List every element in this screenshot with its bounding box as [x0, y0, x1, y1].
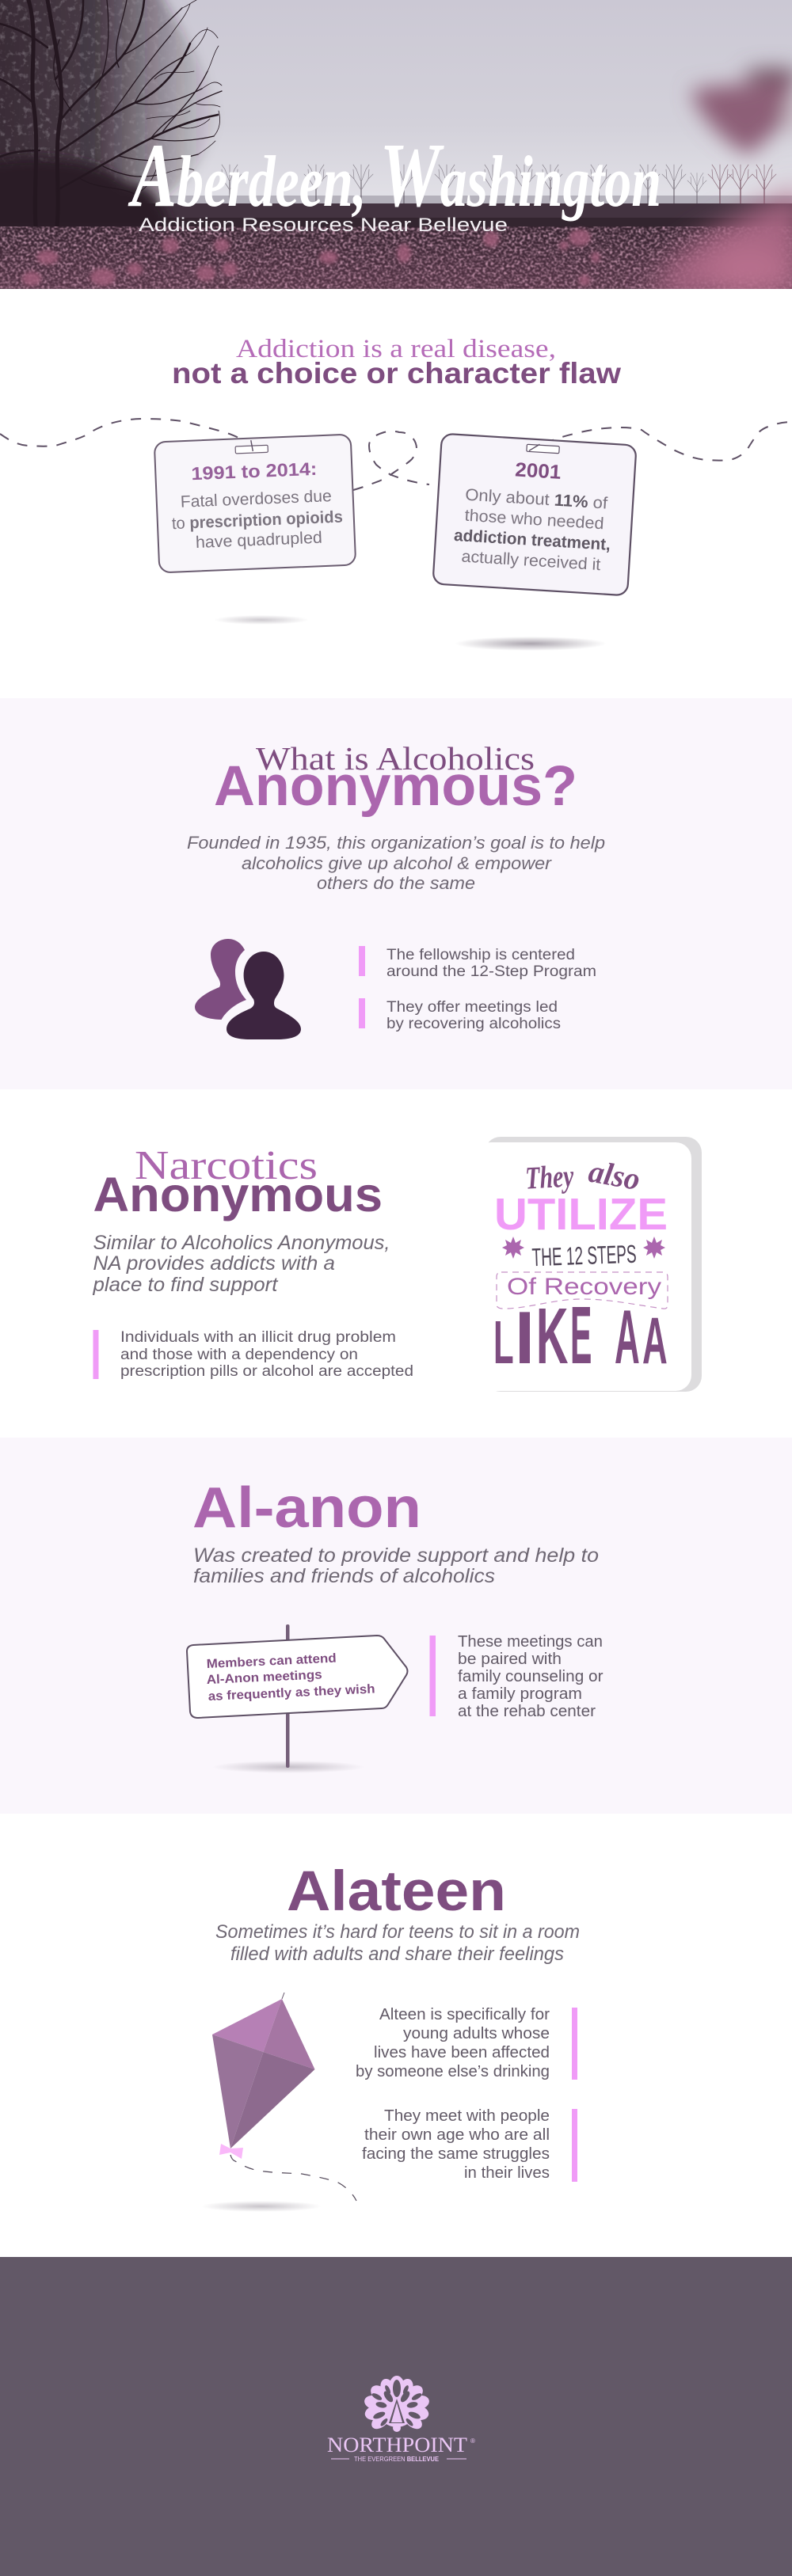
poster: they also utilize the 12 steps: L — [493, 1309, 514, 1377]
card shadow left — [214, 615, 309, 625]
heading: Anonymous? — [214, 755, 577, 818]
title: Aberdeen, Washington — [128, 125, 661, 226]
tree branches — [0, 0, 222, 226]
fact: meetings: They offer meetings led — [386, 999, 558, 1016]
fact: family program: at the rehab center — [458, 1703, 596, 1720]
reddish trees at right of horizon — [708, 165, 776, 204]
heading: Anonymous — [93, 1168, 383, 1222]
section: al-anon — [0, 1438, 792, 1814]
description: NA provides addicts with a — [93, 1252, 335, 1275]
fact: family program: family counseling or — [458, 1668, 604, 1685]
fact: own age: facing the same struggles — [362, 2145, 550, 2163]
fact: own age — [362, 2107, 577, 2182]
fact: meetings: by recovering alcoholics — [386, 1016, 561, 1032]
fact: young adults: young adults whose — [403, 2025, 550, 2042]
dark bushes below the tree — [0, 158, 171, 234]
card: 2001: actually received it — [461, 547, 601, 574]
dark ploughed field — [150, 203, 792, 218]
description — [215, 1921, 580, 1965]
poster: they also utilize the 12 steps: A — [642, 1304, 668, 1378]
card: 2001: addiction treatment, — [454, 526, 611, 554]
blurred flower clusters — [22, 229, 600, 286]
description: filled with adults and share their feelings — [230, 1943, 564, 1965]
fact: young adults — [356, 2006, 577, 2080]
logo wordmark: ® — [470, 2437, 475, 2445]
poster: they also utilize the 12 steps: UTILIZE — [494, 1189, 668, 1240]
section: addiction is a real disease — [0, 289, 792, 698]
poster: they also utilize the 12 steps: also — [586, 1153, 643, 1197]
heading: Al-anon — [192, 1476, 421, 1540]
poster: they also utilize the 12 steps: Of Recovery — [507, 1274, 661, 1300]
section: alcoholics anonymous — [0, 698, 792, 1089]
card: 1991 to 2014: 1991 to 2014: — [191, 458, 318, 484]
heading — [93, 1143, 383, 1222]
fact: young adults: by someone else’s drinking — [356, 2063, 550, 2080]
heading: What is Alcoholics — [256, 740, 535, 777]
signpost — [187, 1624, 407, 1768]
description: others do the same — [317, 873, 475, 893]
description: families and friends of alcoholics — [193, 1565, 495, 1587]
poster: they also utilize the 12 steps: A — [615, 1294, 640, 1380]
card: 2001: Only about 11% of — [465, 486, 608, 513]
fact: young adults: lives have been affected — [374, 2044, 550, 2061]
fact: own age: in their lives — [464, 2164, 550, 2182]
dashed string left — [0, 419, 245, 446]
section: narcotics anonymous — [0, 1089, 792, 1438]
fact: family program: These meetings can — [458, 1633, 603, 1651]
fact: twelve step program: around the 12-Step Program — [386, 963, 596, 980]
card shadow right — [455, 636, 607, 651]
poster: they also utilize the 12 steps: E — [570, 1290, 592, 1381]
card: 1991 to 2014 — [154, 435, 356, 572]
blurred foreground blossom bottom right — [649, 190, 792, 301]
blurred foreground blossom top right — [691, 68, 792, 154]
description: alcoholics give up alcohol & empower — [242, 853, 553, 873]
fact: own age: their own age who are all — [364, 2126, 550, 2144]
fact: twelve step program: The fellowship is centered — [386, 947, 575, 963]
heading — [172, 335, 621, 389]
description — [92, 1232, 390, 1296]
fact: family program — [429, 1633, 604, 1720]
logo: northpoint lotus — [363, 2376, 431, 2432]
dashed string loop — [353, 431, 429, 490]
signpost: as frequently as they wish — [208, 1682, 375, 1704]
fact: who is accepted: and those with a dependency on — [120, 1347, 358, 1363]
poster: they also utilize the 12 steps: They — [524, 1157, 575, 1196]
dashed string right — [525, 422, 792, 461]
description — [193, 1544, 599, 1587]
distant horizon haze — [169, 196, 792, 203]
logo wordmark — [327, 2434, 475, 2463]
poster: they also utilize the 12 steps: THE 12 STEPS — [531, 1240, 637, 1271]
logo wordmark: NORTHPOINT — [327, 2434, 467, 2456]
fact: young adults: Alteen is specifically for — [379, 2006, 550, 2023]
poster: they also utilize the 12 steps — [475, 1137, 702, 1392]
card: 1991 to 2014: to prescription opioids — [171, 508, 343, 533]
card: 2001: 2001 — [515, 458, 562, 484]
fact: meetings — [359, 998, 561, 1032]
heading: Alateen — [287, 1860, 506, 1923]
fact: twelve step program — [359, 946, 596, 980]
description: Founded in 1935, this organization’s goal is to help — [187, 833, 605, 853]
heading: not a choice or character flaw — [172, 357, 621, 389]
icon: kite — [212, 1993, 356, 2201]
description: place to find support — [92, 1274, 279, 1296]
section: alateen — [0, 1814, 792, 2257]
heading: Narcotics — [135, 1143, 318, 1188]
poster: they also utilize the 12 steps: K — [536, 1292, 568, 1381]
icon: two people — [195, 939, 301, 1039]
signpost: Members can attend — [206, 1652, 337, 1671]
fact: family program: be paired with — [458, 1651, 562, 1668]
card: 1991 to 2014: Fatal overdoses due — [180, 487, 332, 511]
fact: who is accepted: prescription pills or alcohol are accepted — [120, 1363, 413, 1380]
signpost shadow — [212, 1761, 364, 1773]
tree foliage mass — [0, 0, 215, 226]
hero banner: field with tree and blurred flowers — [0, 0, 792, 301]
flower field — [0, 226, 792, 289]
fact: family program: a family program — [458, 1685, 582, 1703]
description: Similar to Alcoholics Anonymous, — [93, 1232, 390, 1254]
footer — [0, 2257, 792, 2576]
kite shadow — [201, 2201, 322, 2212]
card: 1991 to 2014: have quadrupled — [195, 529, 322, 552]
heading: Addiction is a real disease, — [236, 335, 556, 363]
fact: own age: They meet with people — [384, 2107, 550, 2125]
logo wordmark: THE EVERGREEN BELLEVUE — [354, 2456, 440, 2463]
card: 2001: those who needed — [464, 507, 604, 533]
subtitle: Addiction Resources Near Bellevue — [139, 215, 508, 236]
description: Was created to provide support and help to — [193, 1544, 599, 1567]
fact: who is accepted — [93, 1329, 413, 1380]
signpost: Al-Anon meetings — [206, 1668, 322, 1687]
description — [187, 833, 605, 893]
distant tree line — [218, 165, 706, 204]
card: 2001 — [432, 434, 637, 595]
description: Sometimes it’s hard for teens to sit in a room — [215, 1921, 580, 1943]
fact: who is accepted: Individuals with an illicit drug problem — [120, 1329, 396, 1346]
poster: they also utilize the 12 steps: I — [515, 1297, 535, 1379]
